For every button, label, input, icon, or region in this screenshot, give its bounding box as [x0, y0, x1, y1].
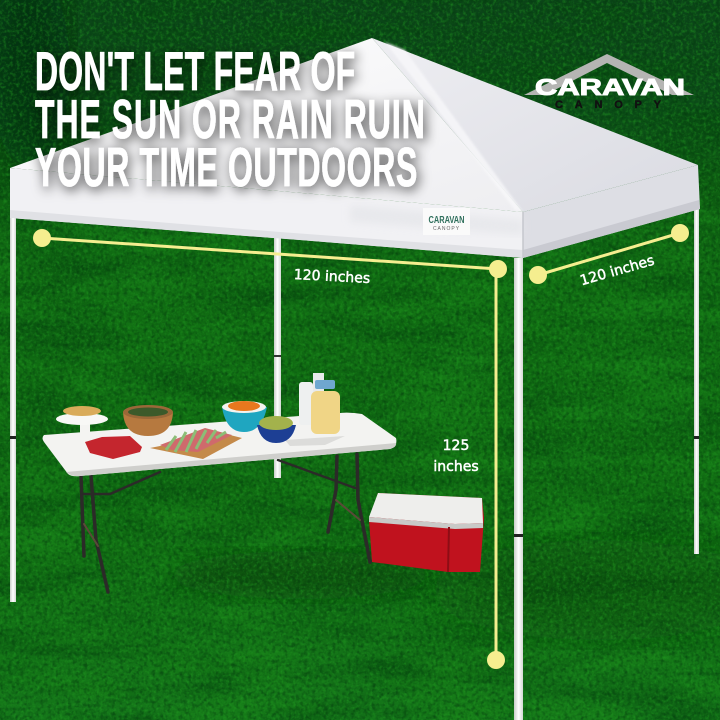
measurement: 120 inches width: 120 inches — [293, 267, 371, 287]
food: salad bowl — [123, 405, 173, 436]
canopy tag — [423, 208, 470, 235]
title: DON'T LET FEAR OF — [35, 40, 355, 102]
measurement: 125 inches height: inches — [433, 459, 479, 475]
canopy tag: CANOPY — [433, 226, 460, 232]
food: pie on cake stand — [56, 406, 108, 440]
measurement: 120 inches depth: 120 inches — [578, 253, 656, 289]
right front tent pole — [514, 258, 523, 720]
measurement: 120 inches width — [33, 229, 507, 287]
logo: Caravan Canopy — [524, 54, 694, 111]
title — [35, 40, 425, 198]
title: YOUR TIME OUTDOORS — [35, 136, 417, 198]
title: THE SUN OR RAIN RUIN — [35, 88, 425, 150]
logo: Caravan Canopy: CANOPY — [555, 99, 662, 111]
measurement: 125 inches height — [433, 269, 505, 669]
right back tent pole — [694, 205, 699, 554]
orange fruit bowl — [222, 401, 267, 432]
canopy tag: CARAVAN — [428, 215, 464, 226]
left front tent pole — [10, 218, 16, 602]
measurement: 125 inches height: 125 — [443, 438, 469, 454]
red tray — [85, 436, 142, 459]
back tent pole — [274, 236, 281, 478]
watermelon board — [150, 428, 242, 459]
tent canopy — [10, 38, 700, 258]
folding table — [42, 413, 396, 476]
grape bowl — [257, 416, 296, 443]
table legs — [81, 454, 370, 592]
cups and drink dispenser — [299, 373, 340, 434]
red cooler — [369, 493, 484, 572]
measurement: 120 inches depth — [529, 224, 689, 289]
logo: Caravan Canopy: CARAVAN — [535, 74, 685, 100]
